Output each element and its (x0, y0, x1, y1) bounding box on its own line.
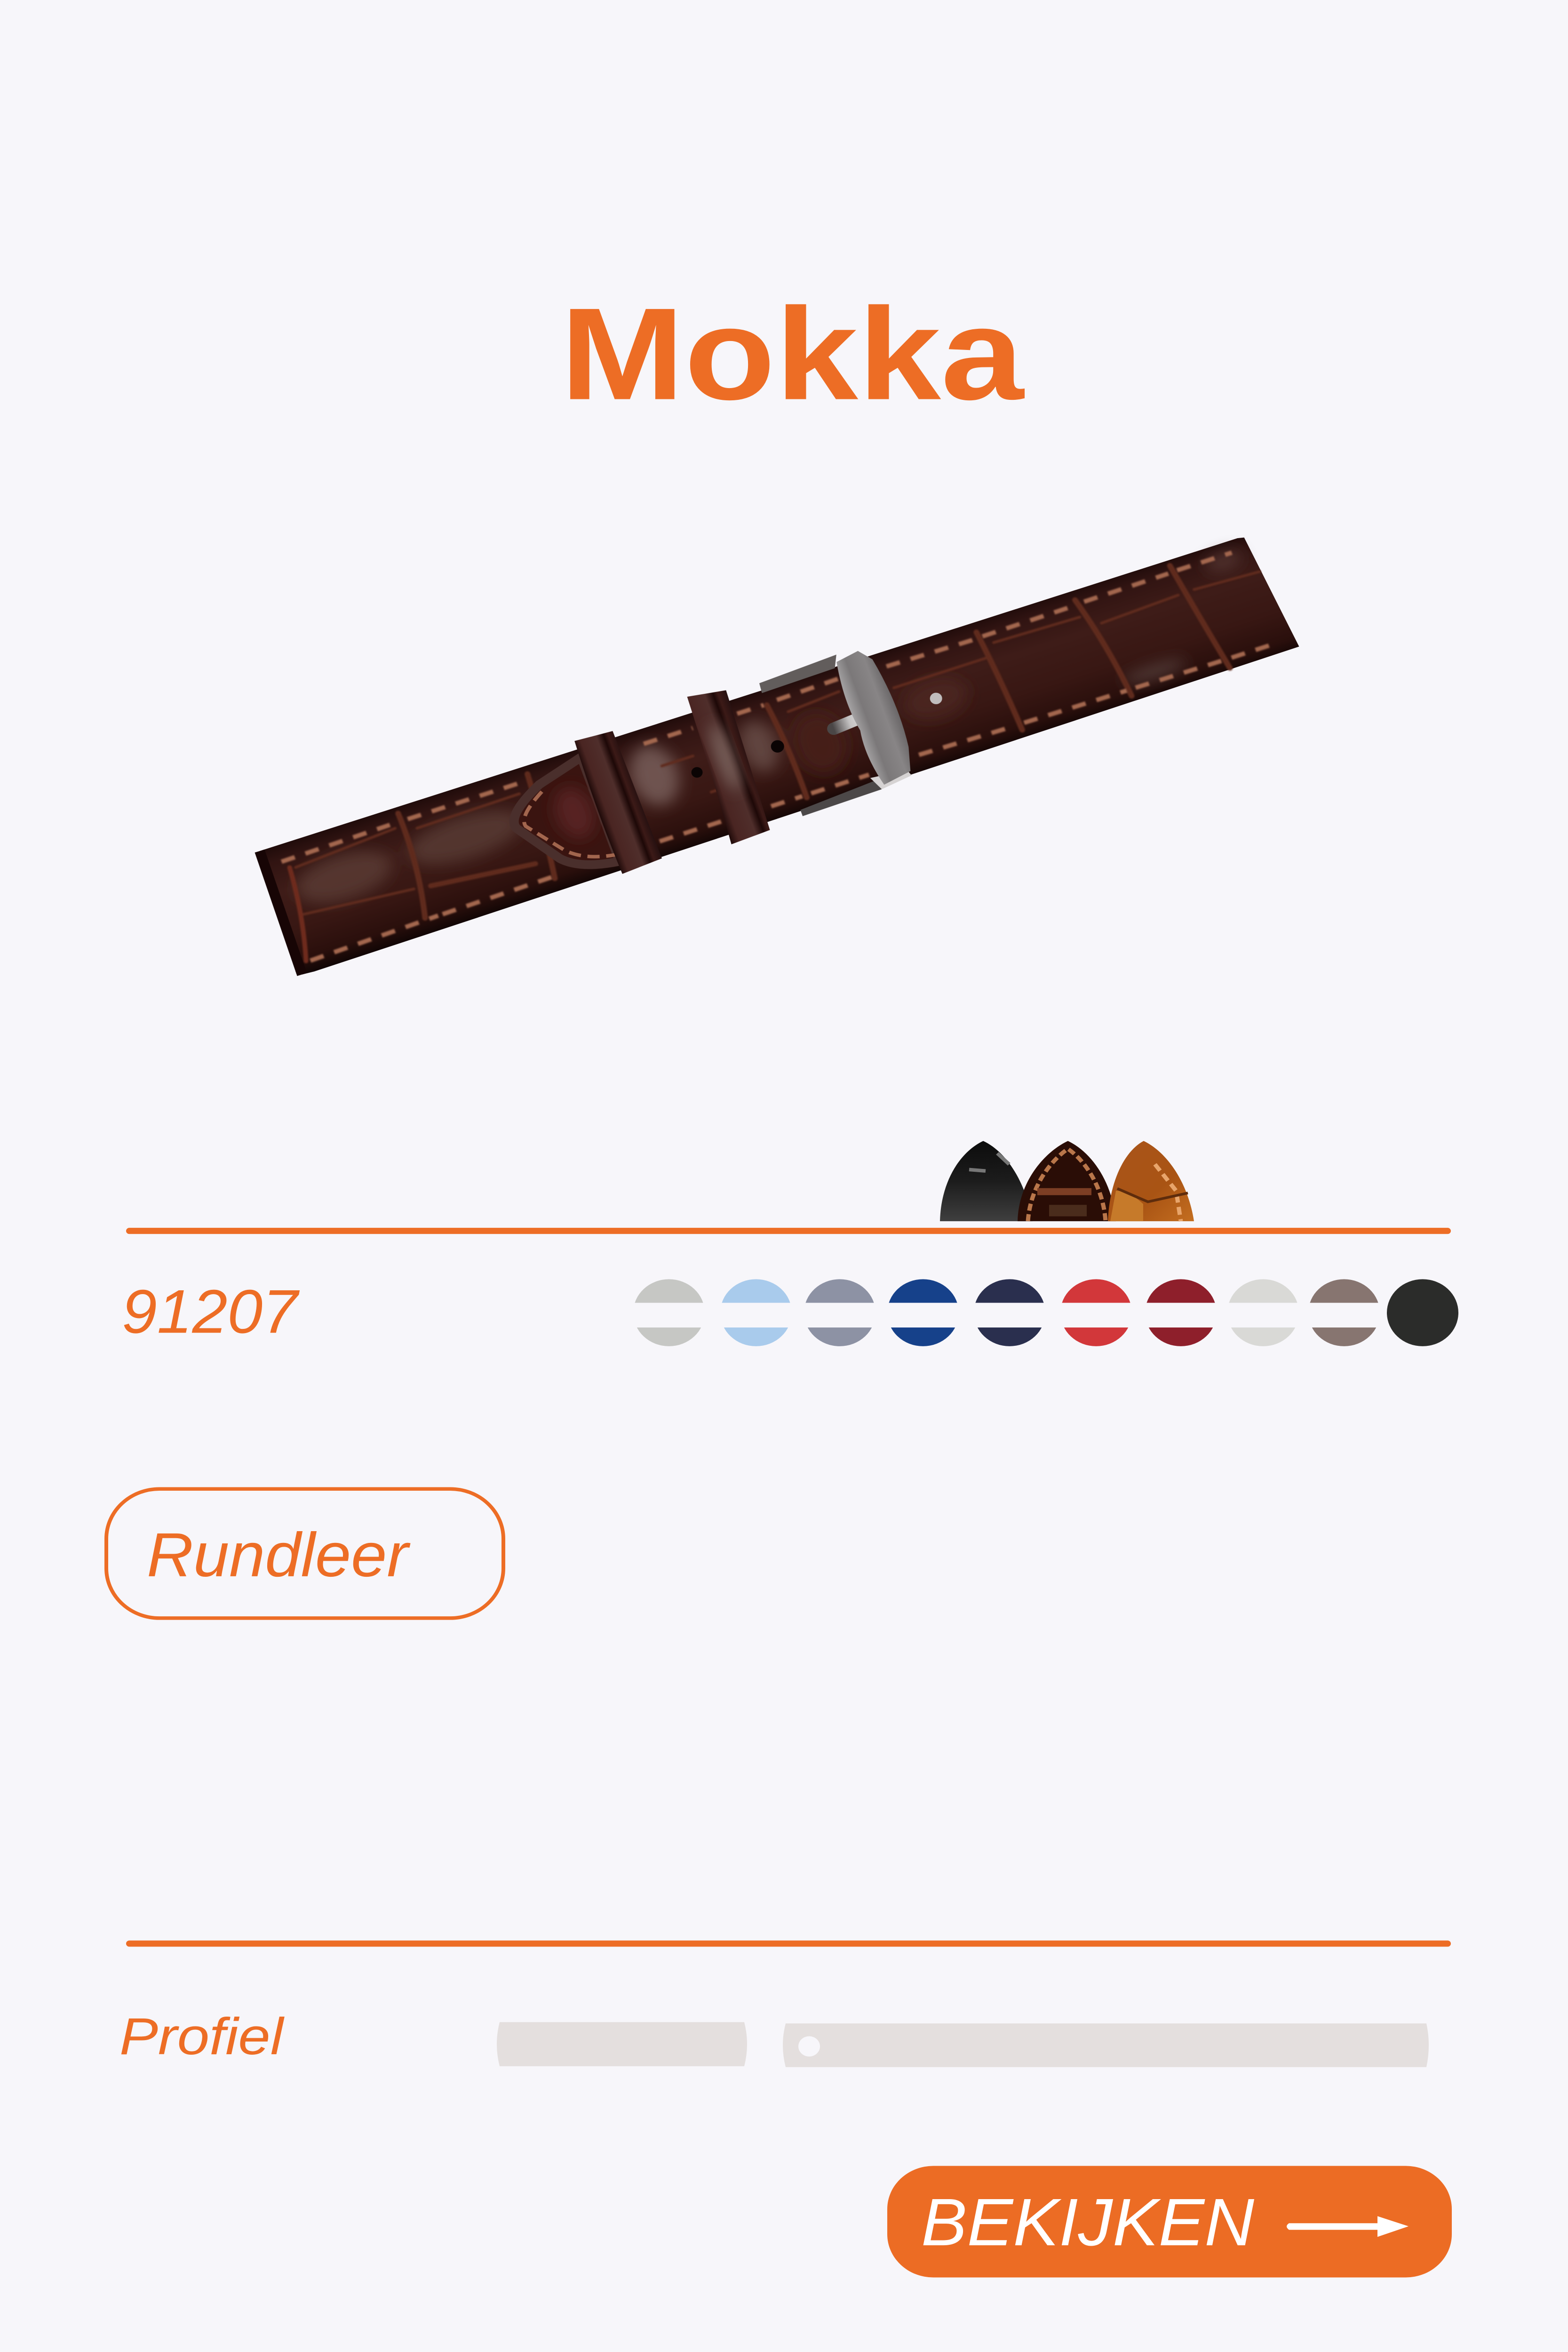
material tag (106, 1489, 503, 1618)
view button: BEKIJKEN (921, 2185, 1255, 2260)
profile label: Profiel (119, 2008, 285, 2066)
watch strap photo (252, 515, 1304, 982)
article number: 91207 (122, 1277, 300, 1346)
strap edge rim (257, 851, 305, 975)
keeper loop left (573, 728, 663, 874)
arrow (1287, 2216, 1409, 2237)
variant: black (940, 1141, 1033, 1221)
profile bar short (497, 2022, 747, 2066)
profile bar long (783, 2024, 1429, 2067)
buckle plate (831, 646, 920, 787)
view button (887, 2166, 1452, 2278)
strap colour variants (940, 1141, 1194, 1221)
strap body (257, 529, 1301, 975)
belt holes (690, 688, 944, 782)
variant: tan (1108, 1141, 1194, 1221)
title: Mokka (560, 281, 1025, 427)
strap stitching (274, 550, 1273, 961)
buckle frame (753, 646, 914, 816)
buckle pin (833, 716, 866, 729)
strap tongue tip (499, 757, 620, 888)
strap panel creases (267, 539, 1288, 966)
keeper loop right (678, 685, 777, 844)
bottom orange rule (126, 1940, 1451, 1947)
top orange rule (126, 1228, 1451, 1234)
material tag: Rundleer (147, 1520, 411, 1589)
strap light and dark patches (284, 547, 1272, 948)
colour swatches (630, 1279, 1458, 1346)
variant: brown (1018, 1141, 1116, 1221)
